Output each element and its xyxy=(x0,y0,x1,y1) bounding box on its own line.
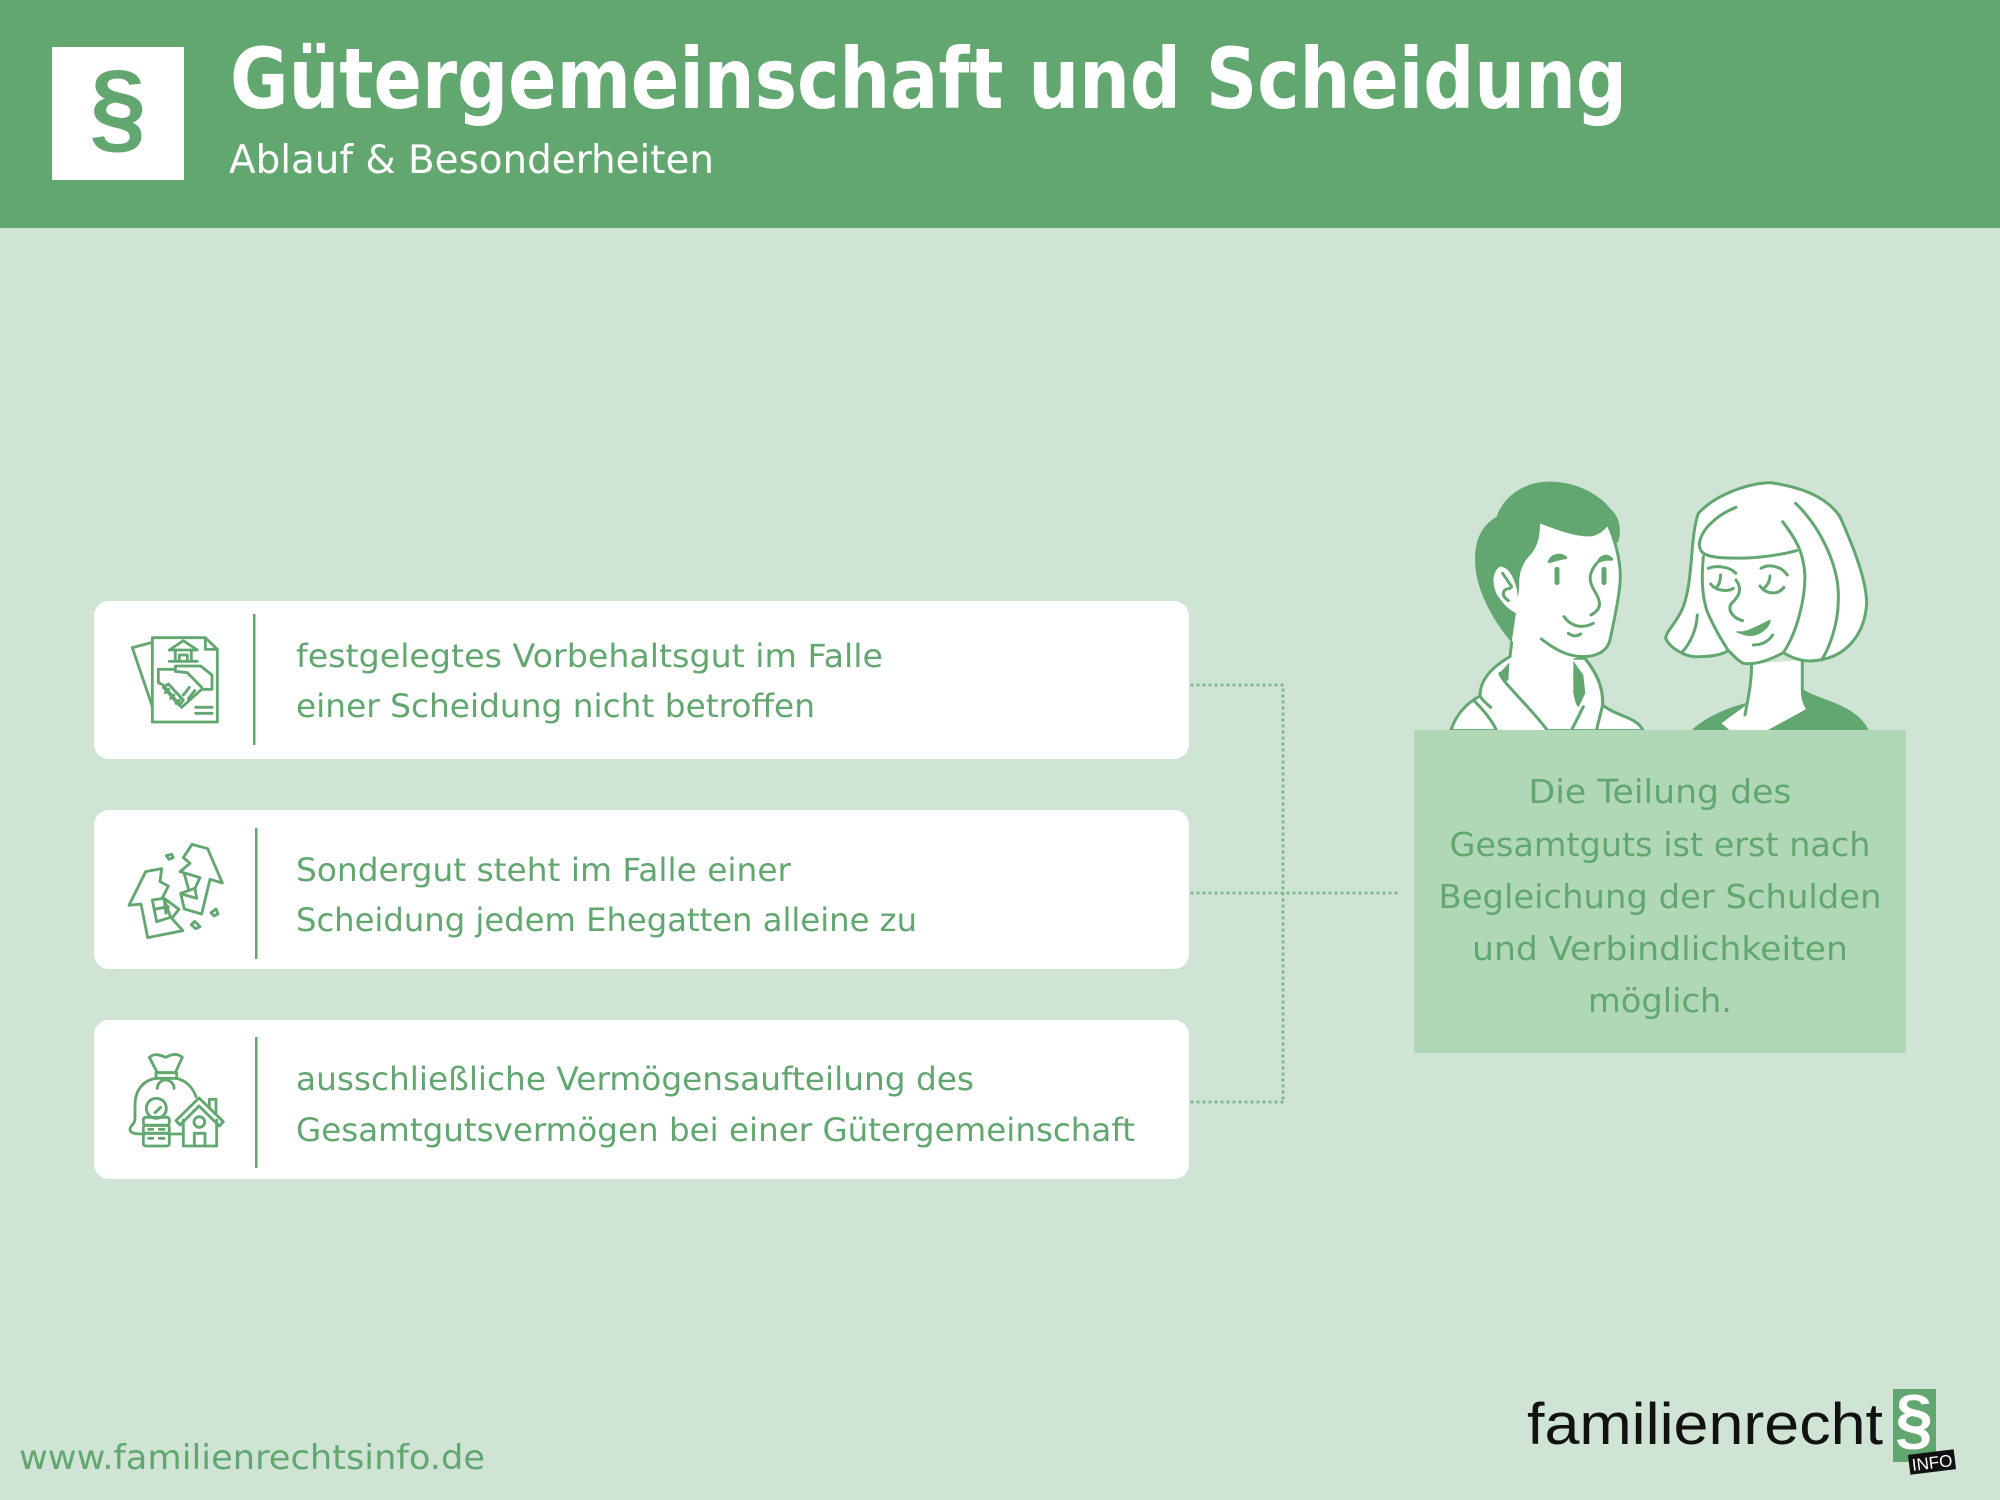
footer url: www.familienrechtsinfo.de xyxy=(19,1438,485,1478)
text: Vermögensaufteilung xyxy=(296,1060,1135,1149)
callout: division of joint property: möglich. xyxy=(1588,981,1732,1020)
logo: familienrecht xyxy=(1527,1392,1883,1457)
logo: INFO xyxy=(1911,1451,1953,1475)
text: Sondergut: Scheidung jedem Ehegatten alleine zu xyxy=(296,901,917,939)
icon: broken house xyxy=(129,844,222,938)
connector lines xyxy=(1192,685,1398,1102)
icon: document with handshake xyxy=(132,638,217,722)
icon: paragraph sign: § xyxy=(90,49,146,163)
callout: division of joint property: Gesamtguts ist erst nach xyxy=(1450,825,1870,864)
callout: division of joint property: Begleichung der Schulden xyxy=(1438,877,1882,916)
icon: paragraph sign xyxy=(52,47,184,180)
panel: card Sondergut xyxy=(94,810,1189,969)
icon: money bag, coins and house xyxy=(130,1054,223,1146)
callout: division of joint property: und Verbindlichkeiten xyxy=(1472,929,1848,968)
text: Vermögensaufteilung: Gesamtgutsvermögen bei einer Gütergemeinschaft xyxy=(296,1111,1135,1149)
text: Sondergut xyxy=(296,851,917,939)
text: Vermögensaufteilung: ausschließliche Vermögensaufteilung des xyxy=(296,1060,974,1098)
text: Vorbehaltsgut: einer Scheidung nicht betroffen xyxy=(296,687,815,725)
logo: § xyxy=(1895,1381,1933,1457)
text: Sondergut: Sondergut steht im Falle einer xyxy=(296,851,792,889)
subtitle: Ablauf & Besonderheiten xyxy=(229,138,714,183)
illustration: couple xyxy=(1451,482,1869,731)
logo xyxy=(1527,1381,1956,1475)
woman xyxy=(1666,483,1869,731)
panel: card Vorbehaltsgut xyxy=(94,601,1189,759)
title: Gütergemeinschaft und Scheidung xyxy=(230,30,1627,128)
callout: division of joint property xyxy=(1414,730,1906,1053)
callout: division of joint property: Die Teilung des xyxy=(1528,772,1792,811)
panel: card Vermögensaufteilung xyxy=(94,1020,1189,1179)
text: Vorbehaltsgut xyxy=(296,637,883,725)
text: Vorbehaltsgut: festgelegtes Vorbehaltsgut im Falle xyxy=(296,637,883,675)
man xyxy=(1451,482,1643,731)
header banner xyxy=(0,0,2000,228)
